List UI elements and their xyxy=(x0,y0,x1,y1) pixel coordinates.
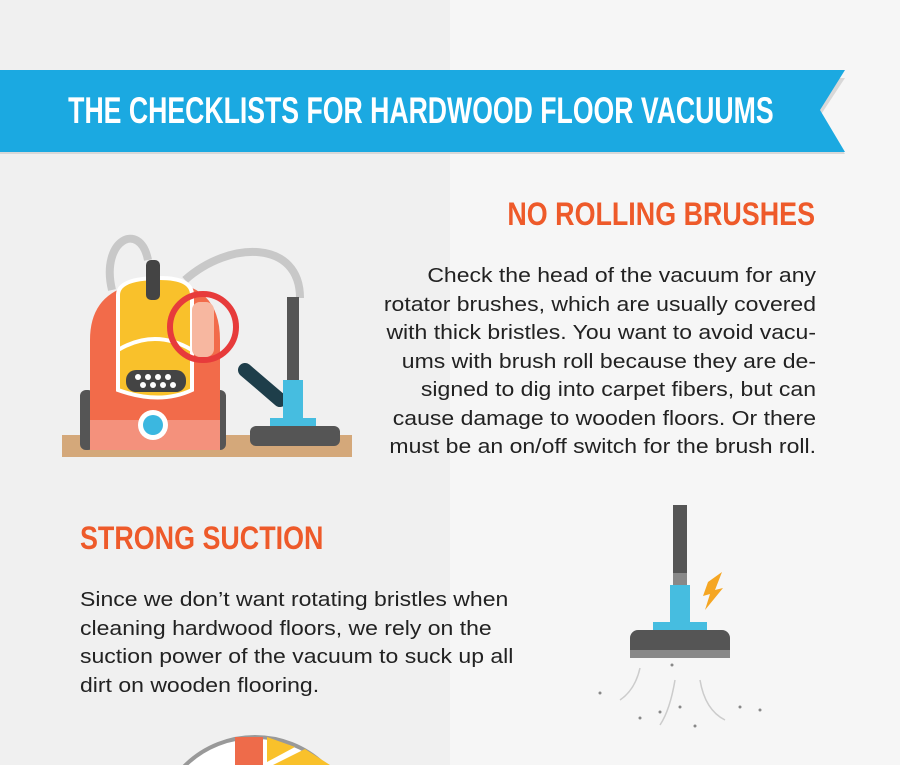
banner xyxy=(0,70,845,154)
text: no rolling brushes xyxy=(384,265,816,458)
text: strong suction: suction power of the vacuum to suck up all xyxy=(80,646,513,668)
text: strong suction: dirt on wooden flooring. xyxy=(80,674,319,696)
text: strong suction xyxy=(80,589,513,696)
text: no rolling brushes: must be an on/off switch for the brush roll. xyxy=(389,436,816,458)
chart: partial pie xyxy=(182,735,330,765)
text: no rolling brushes: ums with brush roll because they are de- xyxy=(402,350,816,372)
text: no rolling brushes: rotator brushes, which are usually covered xyxy=(384,294,816,316)
heading: strong suction: STRONG SUCTION xyxy=(80,520,323,556)
heading: no rolling brushes: NO ROLLING BRUSHES xyxy=(507,196,815,232)
text: no rolling brushes: with thick bristles. You want to avoid vacu- xyxy=(386,322,816,344)
icon: canister vacuum xyxy=(62,234,352,457)
text: no rolling brushes: signed to dig into carpet fibers, but can xyxy=(421,379,816,401)
text: strong suction: cleaning hardwood floors, we rely on the xyxy=(80,618,492,640)
icon: upright vacuum head xyxy=(598,505,762,728)
text: no rolling brushes: cause damage to wooden floors. Or there xyxy=(393,408,816,430)
title: THE CHECKLISTS FOR HARDWOOD FLOOR VACUUMS xyxy=(68,90,774,131)
text: strong suction: Since we don’t want rotating bristles when xyxy=(80,589,508,611)
text: no rolling brushes: Check the head of the vacuum for any xyxy=(427,265,816,287)
